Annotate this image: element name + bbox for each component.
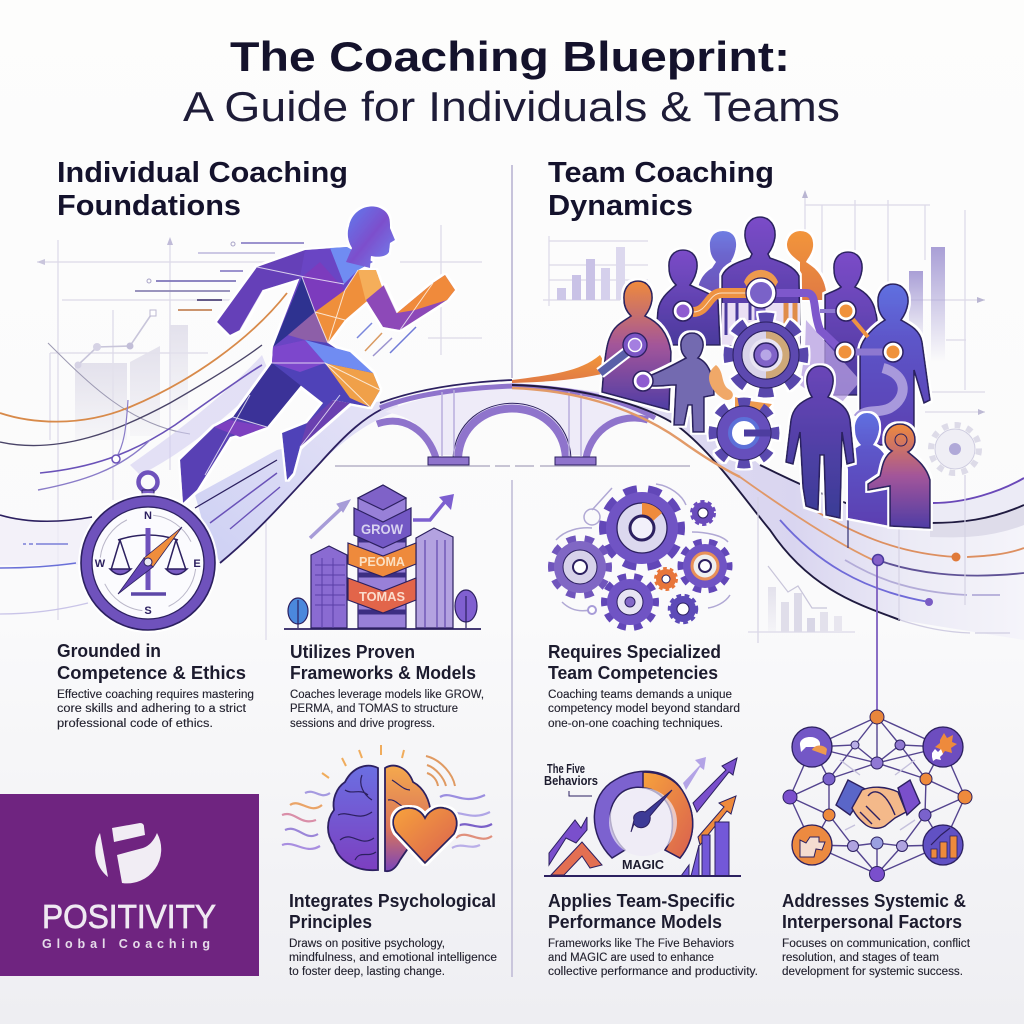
purple curl	[858, 368, 903, 418]
compass icon	[78, 472, 218, 633]
small bottom gear	[670, 596, 696, 622]
left zigzags	[549, 817, 587, 865]
arrows	[683, 757, 706, 790]
bridge and road	[335, 355, 1024, 640]
text block: systemic: development for systemic success.	[782, 966, 963, 978]
banner peoma	[348, 543, 416, 577]
heading: individual coaching: Foundations	[57, 190, 241, 222]
text block: psychological: to foster deep, lasting change.	[289, 966, 445, 978]
bridge arches	[377, 390, 648, 458]
left background chart	[37, 225, 482, 640]
text block: performance: Applies Team-Specific	[548, 891, 735, 911]
gears icon	[552, 484, 730, 627]
front arm	[366, 275, 455, 330]
heading: individual coaching	[57, 157, 348, 222]
right brain	[385, 766, 431, 871]
text block: frameworks: sessions and drive progress.	[290, 718, 435, 730]
compass icon: S	[144, 605, 152, 617]
ground	[544, 875, 741, 877]
deck edges	[380, 380, 512, 403]
text block: performance	[548, 891, 758, 978]
banner tomas: TOMAS	[359, 590, 405, 604]
head	[346, 206, 395, 268]
trees	[288, 598, 308, 624]
text block: psychological: Integrates Psychological	[289, 891, 496, 911]
text block: competence: professional code of ethics.	[57, 718, 213, 730]
title: A Guide for Individuals & Teams	[183, 83, 840, 130]
text block: systemic	[782, 891, 971, 978]
small orange gear	[656, 569, 676, 589]
person: back orange	[787, 231, 827, 300]
five behaviors label: Behaviors	[544, 774, 598, 788]
left gear	[552, 539, 608, 595]
five behaviors label	[544, 762, 598, 788]
bottom-left wave	[0, 515, 92, 614]
banner grow	[354, 508, 411, 548]
team background charts	[543, 190, 985, 415]
person: left purple	[655, 250, 720, 345]
text block: psychological: Draws on positive psychology,	[289, 938, 445, 950]
lavender area behind gear	[800, 320, 857, 410]
road band right	[512, 383, 1024, 640]
logo wordmark: POSITIVITY	[42, 898, 216, 935]
needle	[144, 527, 182, 567]
text block: competencies: Requires Specialized	[548, 642, 721, 662]
heading: team coaching	[548, 157, 774, 222]
person: back blue	[698, 231, 745, 300]
lower divider	[511, 480, 513, 977]
front leg	[272, 340, 380, 480]
lower right chart	[748, 566, 855, 632]
heading: team coaching: Team Coaching	[548, 157, 774, 189]
text block: psychological: Principles	[289, 912, 372, 932]
person: right blue	[860, 284, 930, 445]
compass letters: N	[144, 510, 152, 522]
road band left	[195, 400, 400, 563]
text block: systemic: Focuses on communication, conflict	[782, 938, 971, 950]
links	[790, 717, 965, 874]
small team gear	[713, 397, 775, 464]
compass ring	[138, 472, 158, 492]
text block: competence: Competence & Ethics	[57, 663, 246, 683]
bars	[681, 822, 729, 876]
text block: frameworks: Utilizes Proven	[290, 642, 415, 662]
nodes	[783, 710, 972, 882]
person: right purple	[825, 252, 880, 395]
small top gear	[692, 502, 714, 524]
orbit arrows	[556, 484, 730, 611]
torso	[273, 247, 373, 347]
logo mark	[95, 823, 161, 883]
network connector line	[872, 554, 884, 716]
text block: frameworks	[290, 642, 484, 730]
compass icon: E	[193, 558, 201, 570]
left brain	[328, 766, 378, 870]
heading: team coaching: Dynamics	[548, 190, 693, 222]
text block: psychological	[289, 891, 497, 978]
text block: performance: Frameworks like The Five Behaviors	[548, 938, 734, 950]
text block: systemic: Interpersonal Factors	[782, 912, 962, 932]
handshake	[836, 780, 920, 828]
text block: competencies: Coaching teams demands a unique	[548, 689, 732, 701]
text block: competence: core skills and adhering to a strict	[57, 703, 247, 715]
rear arm	[217, 250, 305, 335]
text block: competence: Effective coaching requires mastering	[57, 689, 254, 701]
connector nodes	[623, 270, 903, 391]
deck	[380, 386, 655, 418]
scales	[110, 535, 187, 574]
right gear	[681, 542, 729, 590]
five behaviors label: The Five	[547, 762, 585, 776]
bottom gear	[605, 577, 655, 627]
motion ticks by front arm	[357, 323, 416, 356]
person: left front orange	[602, 281, 671, 410]
flowing curves left	[0, 293, 287, 490]
big gear	[604, 490, 680, 566]
person: rear blue	[848, 413, 890, 526]
needle	[631, 790, 672, 832]
title	[183, 33, 840, 130]
text block: competence	[57, 641, 254, 730]
magic label: MAGIC	[622, 857, 665, 872]
text block: competencies: competency model beyond standard	[548, 703, 740, 715]
person: back center	[722, 217, 800, 345]
rear leg	[180, 347, 303, 503]
text block: frameworks: PERMA, and TOMAS to structure	[290, 703, 458, 715]
framework tower icon	[284, 485, 481, 629]
person: orange front	[868, 424, 930, 528]
pipes	[600, 293, 894, 373]
orange swirl	[709, 365, 733, 400]
gauge arc	[594, 771, 693, 858]
big team gear	[729, 318, 803, 392]
runner figure	[180, 206, 455, 503]
banner grow: GROW	[361, 521, 404, 537]
speed lines	[135, 242, 304, 310]
waves	[282, 792, 492, 849]
logo panel	[0, 794, 259, 976]
text block: performance: and MAGIC are used to enhance	[548, 952, 714, 964]
person: small center	[644, 333, 714, 432]
brain and heart icon	[282, 745, 492, 871]
compass icon: W	[95, 558, 106, 570]
network icon	[783, 710, 972, 882]
ground line	[284, 628, 481, 630]
rays	[322, 745, 455, 786]
gauge icon	[544, 757, 741, 876]
heading: individual coaching: Individual Coaching	[57, 157, 348, 189]
text block: psychological: mindfulness, and emotional intelligence	[289, 952, 497, 964]
text block: competencies: one-on-one coaching techniques.	[548, 718, 723, 730]
text block: performance: Performance Models	[548, 912, 722, 932]
person: front dark	[786, 366, 854, 518]
heart	[393, 808, 457, 863]
text block: systemic: Addresses Systemic &	[782, 891, 966, 911]
title: The Coaching Blueprint:	[230, 33, 790, 80]
team of people	[600, 217, 930, 528]
banner tomas	[348, 578, 416, 613]
banner peoma: PEOMA	[359, 555, 405, 569]
text block: frameworks: Coaches leverage models like GROW,	[290, 689, 484, 701]
facet lines	[205, 267, 433, 475]
stripes behind gear	[722, 303, 800, 345]
faded gear	[931, 425, 979, 473]
icon circles	[792, 727, 963, 865]
text block: performance: collective performance and productivity.	[548, 966, 758, 978]
text block: systemic: resolution, and stages of team	[782, 952, 939, 964]
logo tagline: Global Coaching	[42, 937, 210, 951]
text block: competencies: Team Competencies	[548, 663, 718, 683]
text block: competencies	[548, 642, 740, 730]
right flowing lines	[740, 475, 1024, 643]
text block: competence: Grounded in	[57, 641, 161, 661]
text block: frameworks: Frameworks & Models	[290, 663, 476, 683]
center divider top	[511, 165, 513, 378]
buildings	[311, 546, 347, 628]
spandrels	[385, 388, 650, 455]
